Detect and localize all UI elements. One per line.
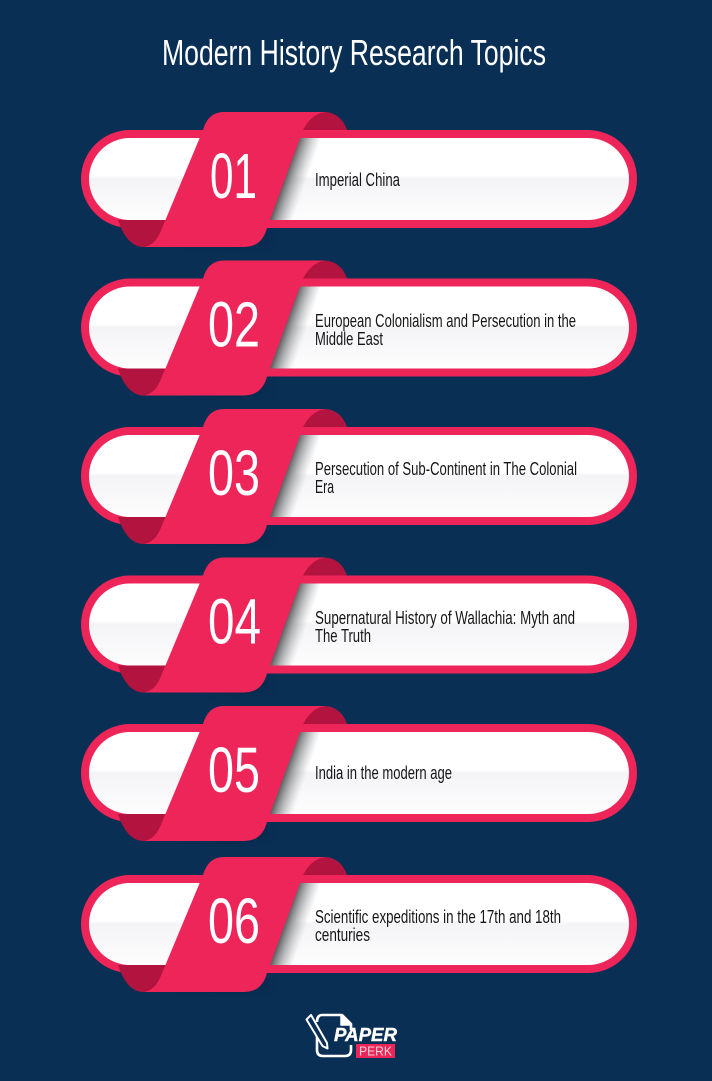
topic text 03: Era [315,477,335,497]
wordmark PAPER: PAPER [334,1024,398,1045]
number 04: 04 [208,586,261,658]
topic text 04 [315,608,575,646]
icon: page and pencil [306,1015,351,1056]
title: Modern History Research Topics [162,32,546,73]
topic text 01: Imperial China [315,170,401,190]
topic text 03 [315,459,577,497]
panel: topic 04 [81,558,637,692]
topic text 06 [315,907,561,945]
panel: topic 01 [81,112,637,247]
topic text 05: India in the modern age [315,763,452,783]
panel: topic 06 [81,857,637,992]
topic text 04: Supernatural History of Wallachia: Myth and [315,608,575,628]
topic text 06: centuries [315,925,370,945]
topic text 02 [315,311,576,349]
panel: topic 05 [81,706,637,841]
topic text 03: Persecution of Sub-Continent in The Colonial [315,459,577,479]
number 05: 05 [208,734,260,806]
number 01: 01 [210,140,257,212]
logo: Paper Perk [306,1015,398,1058]
panel: topic 02 [81,260,637,396]
number 03: 03 [208,437,260,509]
wordmark PERK: PERK [359,1044,393,1058]
topic text 02: Middle East [315,329,383,349]
number 02: 02 [208,288,260,360]
topic text 06: Scientific expeditions in the 17th and 18th [315,907,561,927]
topic text 04: The Truth [315,626,371,646]
panel: topic 03 [81,409,637,544]
topic text 02: European Colonialism and Persecution in the [315,311,576,331]
number 06: 06 [208,885,260,957]
